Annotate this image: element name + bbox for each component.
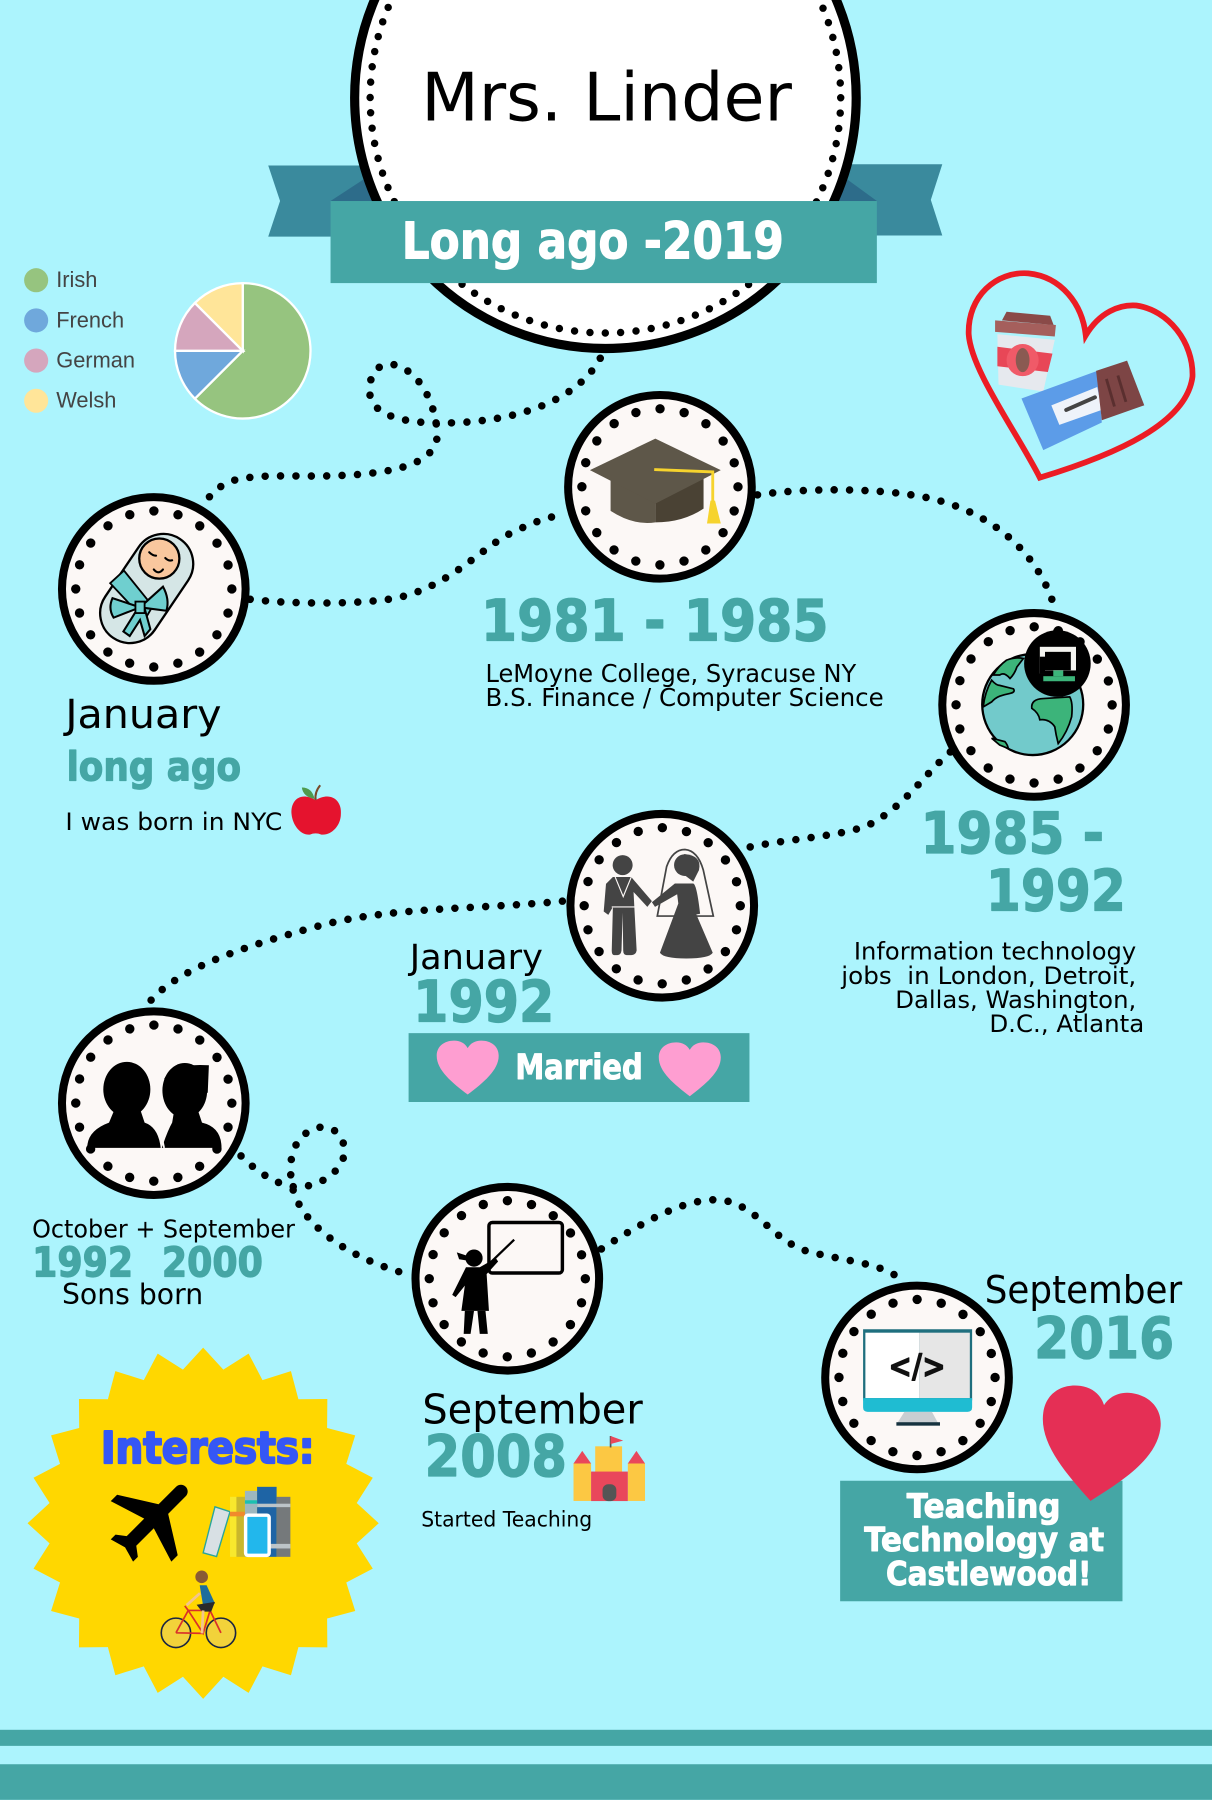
icon: two silhouettes	[87, 1062, 222, 1148]
legend: heritage: Welsh	[56, 388, 116, 413]
legend: heritage: German	[56, 347, 135, 372]
icon: castle	[574, 1436, 645, 1501]
text: birth: I was born in NYC	[65, 808, 282, 836]
Castlewood banner: Teaching	[907, 1486, 1061, 1525]
dotted path: birth to college	[250, 514, 565, 603]
text: wedding date: January	[408, 938, 543, 978]
icon: airplane	[92, 1456, 216, 1581]
dotted path: teaching to Castlewood	[601, 1200, 901, 1280]
icon: cyclist	[161, 1571, 236, 1648]
Castlewood banner: Castlewood!	[886, 1554, 1091, 1593]
icon: apple	[291, 785, 341, 835]
medallion: graduation	[568, 395, 752, 579]
text: IT career: jobs in London, Detroit,	[840, 962, 1136, 990]
text: college: B.S. Finance / Computer Science	[485, 683, 884, 712]
text: IT career: Information technology	[854, 938, 1136, 966]
text: college	[481, 588, 884, 712]
text: IT career: 1985 -	[920, 800, 1104, 867]
text: sons: Sons born	[62, 1277, 203, 1311]
Castlewood banner	[840, 1481, 1122, 1601]
dotted path: IT jobs to wedding	[735, 752, 950, 851]
text: teaching start: September	[422, 1385, 643, 1433]
married banner: Married	[515, 1048, 643, 1088]
icon: computer badge	[1024, 627, 1091, 697]
footer bars	[0, 1730, 1212, 1800]
title badge circle	[355, 0, 856, 349]
dotted path: wedding to sons	[146, 901, 562, 1007]
text: birth	[62, 692, 282, 836]
text: wedding date: 1992	[413, 969, 554, 1036]
medallion: coding	[825, 1286, 1009, 1469]
text: college: LeMoyne College, Syracuse NY	[485, 659, 857, 688]
text: birth: long ago	[67, 745, 241, 791]
text: wedding date	[408, 938, 554, 1036]
interests starburst	[28, 1348, 379, 1699]
date banner	[331, 201, 877, 283]
text: teaching start: 2008	[425, 1423, 567, 1490]
medallion: teacher	[415, 1187, 599, 1371]
legend: heritage: French	[56, 307, 124, 332]
text: IT career: Dallas, Washington,	[895, 986, 1136, 1014]
icon: swaddled baby	[89, 522, 205, 655]
icon: red heart	[1032, 1381, 1165, 1509]
married banner	[409, 1033, 749, 1102]
text: September 2016: September	[985, 1268, 1183, 1312]
pie chart: heritage	[175, 283, 311, 419]
icon: monitor with code: </>	[888, 1346, 946, 1385]
legend: heritage: Irish	[56, 267, 97, 292]
legend: heritage	[24, 267, 135, 413]
interests heading: Interests:	[101, 1424, 314, 1474]
dotted path: sons to teaching	[241, 1127, 407, 1274]
text: IT career: 1992	[986, 857, 1126, 924]
text: college: 1981 - 1985	[481, 588, 829, 655]
text: September 2016	[985, 1268, 1183, 1372]
medallion: globe	[942, 613, 1126, 797]
dotted path: college to IT jobs	[758, 490, 1055, 608]
dotted path: start to birth	[204, 358, 600, 505]
text: sons: 2000	[162, 1238, 263, 1286]
text: sons: October + September	[32, 1214, 296, 1243]
Castlewood banner: Technology at	[864, 1520, 1104, 1559]
text: IT career: D.C., Atlanta	[989, 1010, 1144, 1038]
ribbon tails	[268, 164, 942, 237]
text: teaching start	[421, 1385, 643, 1533]
medallion: sons	[62, 1011, 246, 1195]
text: sons: 1992	[32, 1238, 133, 1286]
text: IT career	[840, 800, 1144, 1038]
icon: books and tablet	[203, 1487, 290, 1557]
icon: graduation cap	[590, 439, 721, 524]
medallion: baby	[62, 497, 246, 681]
icon: bride and groom	[604, 850, 713, 959]
text: birth: January	[62, 692, 222, 738]
date banner: Long ago -2019	[402, 211, 784, 270]
medallion: wedding	[570, 814, 754, 998]
text: sons	[32, 1214, 296, 1311]
icon: heart with coffee and chocolate	[969, 273, 1193, 478]
icon: monitor with code	[863, 1329, 972, 1426]
icon: globe	[982, 654, 1083, 755]
text: September 2016: 2016	[1034, 1305, 1174, 1372]
text: teaching start: Started Teaching	[421, 1508, 592, 1533]
icon: teacher at board	[452, 1223, 562, 1334]
title: Mrs. Linder	[421, 59, 793, 137]
